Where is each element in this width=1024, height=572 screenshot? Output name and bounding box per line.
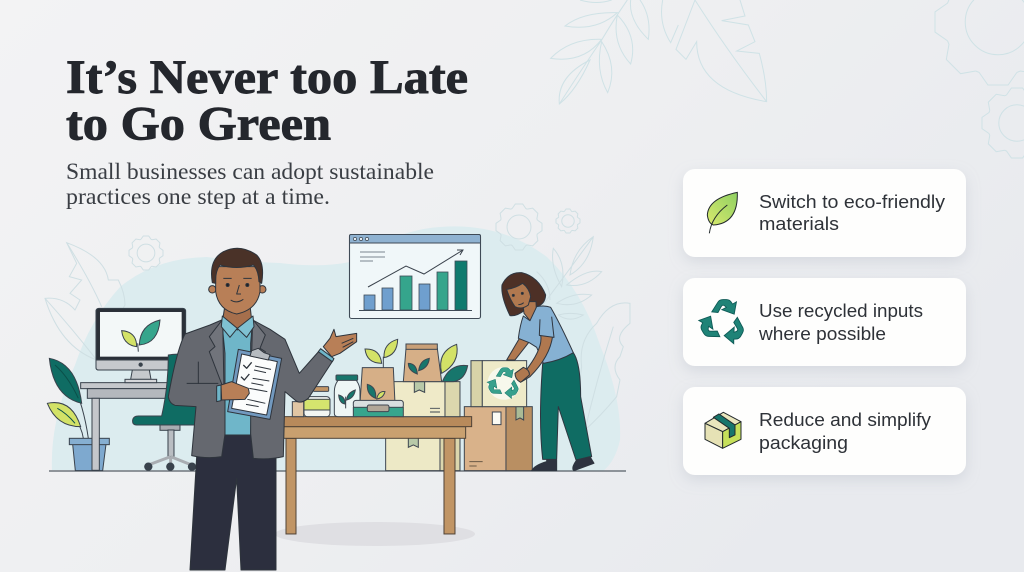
woman shirt [518, 306, 573, 363]
woman shoes [532, 460, 557, 471]
gear left [129, 236, 163, 270]
card text: packaging [759, 433, 848, 453]
back leaves [441, 344, 468, 382]
illustration backdrop blob [52, 226, 620, 471]
card text: Switch to eco-friendly [759, 192, 945, 212]
decorative branch [551, 0, 649, 104]
man right cuff [318, 349, 334, 362]
kraft bag large [403, 344, 442, 382]
subtitle: practices one step at a time. [66, 184, 330, 209]
woman [502, 273, 594, 471]
card: eco-friendly materials [683, 169, 966, 257]
card text: Reduce and simplify [759, 410, 931, 430]
man head [209, 248, 266, 314]
potted plant [47, 358, 109, 471]
man trousers [190, 434, 276, 570]
desk [81, 383, 167, 470]
icon: leaf [707, 192, 737, 233]
cardboard box stack [464, 361, 532, 471]
right branch and leaf [537, 237, 630, 430]
glass jar small [304, 387, 330, 417]
card text [758, 301, 923, 344]
glass jar big [334, 375, 360, 417]
items behind table and boxes [386, 361, 532, 471]
decorative large leaf [662, 0, 767, 102]
man left cuff [217, 385, 221, 402]
office chair [133, 354, 197, 470]
card text: materials [759, 214, 839, 234]
card: packaging [683, 387, 966, 475]
kraft bag small [360, 368, 395, 403]
man [168, 248, 357, 570]
woman near arm [516, 335, 553, 382]
decorative outlines in illustration [45, 204, 630, 430]
icon: recycle [697, 300, 748, 345]
man right hand [323, 329, 357, 357]
gear small centre [556, 209, 580, 233]
lunch box [353, 400, 403, 417]
small stub box [292, 402, 304, 417]
table [278, 417, 472, 534]
card text [759, 410, 931, 453]
woman trousers [540, 353, 592, 460]
decorative gear large [935, 0, 1024, 85]
clipboard [228, 348, 282, 419]
seedling [365, 339, 398, 368]
title: It’s Never too Late [66, 51, 468, 104]
recycle symbol on box [486, 367, 521, 400]
computer monitor [96, 308, 186, 383]
man neck and collar [223, 305, 252, 330]
decorative gear small [982, 88, 1024, 158]
woman front hand [515, 367, 529, 382]
man lapels [209, 319, 224, 390]
subtitle [66, 159, 434, 209]
woman face [507, 283, 531, 308]
man shirt [222, 320, 253, 435]
trend arrow [368, 250, 463, 287]
decorative foliage and gears, top right [551, 0, 1024, 158]
card text: Use recycled inputs [759, 301, 923, 321]
monitor leaves [139, 320, 160, 345]
card: recycled inputs [683, 278, 966, 366]
chart bars [364, 261, 467, 310]
chart window [350, 234, 480, 318]
subtitle: Small businesses can adopt sustainable [66, 159, 434, 184]
table shadow [275, 522, 475, 546]
desk scene [47, 308, 197, 471]
cream box [393, 382, 460, 417]
title [66, 51, 468, 150]
woman sleeve [539, 317, 554, 337]
box under table [386, 433, 460, 471]
woman neck [523, 302, 537, 321]
floor line [49, 470, 626, 472]
man left hand [221, 382, 249, 400]
woman far arm [507, 337, 529, 360]
products on table [292, 339, 468, 417]
gear centre [496, 204, 542, 250]
man jacket [168, 320, 225, 458]
left feather leaves [45, 243, 125, 360]
woman hair back [502, 273, 546, 316]
icon: box [705, 412, 741, 448]
title: to Go Green [66, 98, 331, 150]
card text [759, 192, 945, 234]
card text: where possible [758, 324, 886, 344]
